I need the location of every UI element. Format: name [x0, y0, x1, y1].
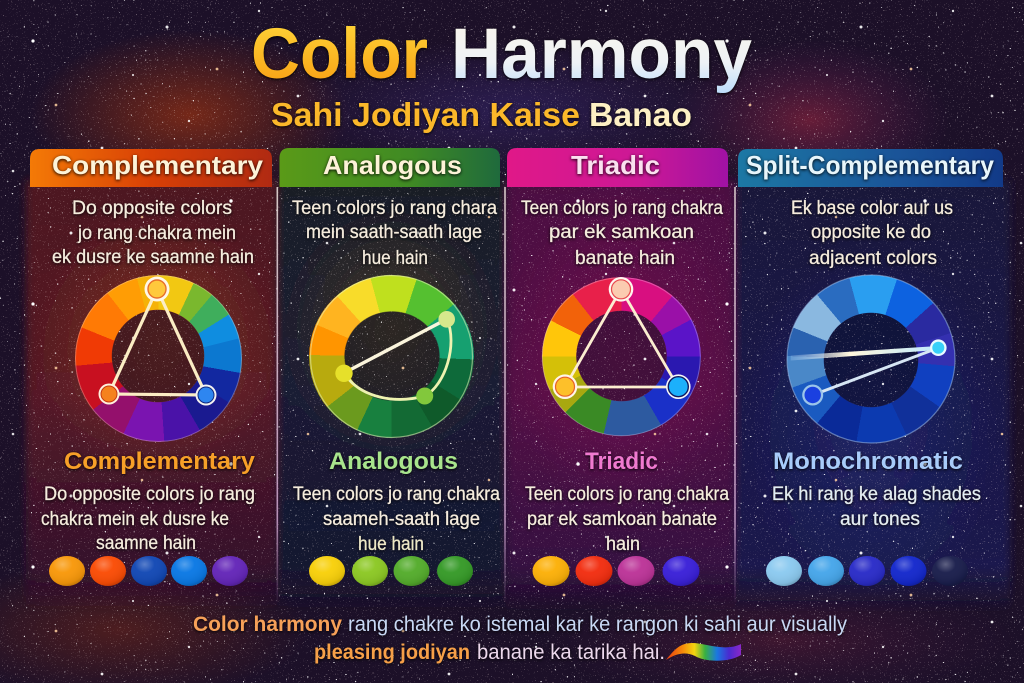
connector lines	[791, 346, 938, 360]
details: Do opposite colors jo rang	[44, 483, 255, 505]
subheading: Complementary	[64, 448, 255, 475]
swatches	[766, 556, 968, 586]
icon: rainbow ribbon	[666, 643, 741, 661]
description: Teen colors jo rang chakra	[521, 197, 723, 219]
details: Teen colors jo rang chakra	[293, 483, 500, 505]
header: Analogous: Analogous	[323, 150, 462, 180]
description: mein saath-saath lage	[306, 221, 482, 243]
description	[292, 197, 497, 269]
panel: complementary	[30, 149, 272, 586]
column dividers	[276, 187, 736, 602]
title: Color	[251, 15, 428, 94]
footer text: banane ka tarika hai.	[477, 641, 665, 664]
swatches	[532, 556, 700, 586]
handle: yellow	[144, 276, 170, 302]
connector arc	[344, 319, 451, 399]
swatches	[49, 556, 248, 586]
color wheel: split-complementary	[787, 275, 955, 443]
panel: triadic	[507, 148, 729, 586]
description: jo rang chakra mein	[77, 222, 236, 244]
header: Complementary: Complementary	[52, 150, 264, 180]
handle: yellow	[335, 365, 353, 382]
description	[791, 197, 953, 269]
footer text: rang chakre ko istemal kar ke rangon ki sahi aur visually	[348, 613, 847, 636]
connector line	[344, 319, 447, 373]
handle: blue	[196, 384, 216, 406]
header: Complementary	[30, 149, 272, 187]
description	[52, 197, 254, 268]
subtitle: Banao	[589, 96, 692, 133]
footer text: Color harmony	[193, 613, 342, 636]
handle: cyan	[930, 339, 947, 356]
panel: analogous	[280, 148, 500, 586]
subtitle: Sahi Jodiyan Kaise	[271, 96, 580, 133]
description: ek dusre ke saamne hain	[52, 246, 254, 268]
triangle connector lines	[109, 289, 206, 395]
subheading: Triadic	[585, 448, 658, 475]
details: saamne hain	[96, 532, 196, 554]
details	[772, 483, 981, 530]
details: hain	[606, 533, 640, 555]
description: banate hain	[575, 247, 675, 269]
details: aur tones	[840, 508, 920, 530]
description: hue hain	[362, 247, 428, 269]
details	[41, 483, 255, 554]
handle: pale green	[438, 311, 455, 328]
handle: blue	[802, 384, 823, 406]
header: Split-Complementary: Split-Complementary	[746, 150, 994, 180]
handle: cyan	[666, 374, 691, 399]
details: Teen colors jo rang chakra	[525, 483, 729, 505]
header: Triadic: Triadic	[571, 150, 660, 180]
description: adjacent colors	[809, 247, 937, 269]
panel: split-complementary	[738, 149, 1003, 586]
description: Teen colors jo rang chara	[292, 197, 497, 219]
details: chakra mein ek dusre ke	[41, 508, 229, 530]
details	[293, 483, 500, 555]
title	[251, 15, 752, 94]
title: Harmony	[451, 15, 752, 94]
details: Ek hi rang ke alag shades	[772, 483, 981, 505]
subheading: Analogous	[329, 448, 458, 475]
color wheel: triadic	[542, 277, 701, 436]
wheel hole shading	[112, 310, 918, 407]
footer text	[193, 613, 847, 664]
footer text: pleasing jodiyan	[314, 641, 470, 664]
handle: green	[416, 388, 433, 404]
details: saameh-saath lage	[323, 508, 480, 530]
handle: peach	[609, 277, 633, 302]
description	[521, 197, 723, 269]
description: opposite ke do	[811, 221, 931, 243]
details	[525, 483, 729, 555]
description: Ek base color aur us	[791, 197, 953, 219]
subheading: Monochromatic	[773, 448, 963, 475]
color wheel: complementary	[75, 275, 242, 442]
handle: orange	[98, 384, 120, 404]
handle: yellow	[553, 374, 577, 399]
panel backgrounds	[26, 180, 1010, 610]
description: par ek samkoan	[549, 221, 694, 243]
color wheel: analogous	[309, 275, 474, 438]
header: Analogous	[280, 148, 500, 187]
details: hue hain	[358, 533, 424, 555]
triangle connector lines	[565, 289, 678, 387]
details: par ek samkoan banate	[527, 508, 717, 530]
description: Do opposite colors	[72, 197, 232, 219]
swatches	[309, 556, 473, 586]
header: Triadic	[507, 148, 728, 187]
